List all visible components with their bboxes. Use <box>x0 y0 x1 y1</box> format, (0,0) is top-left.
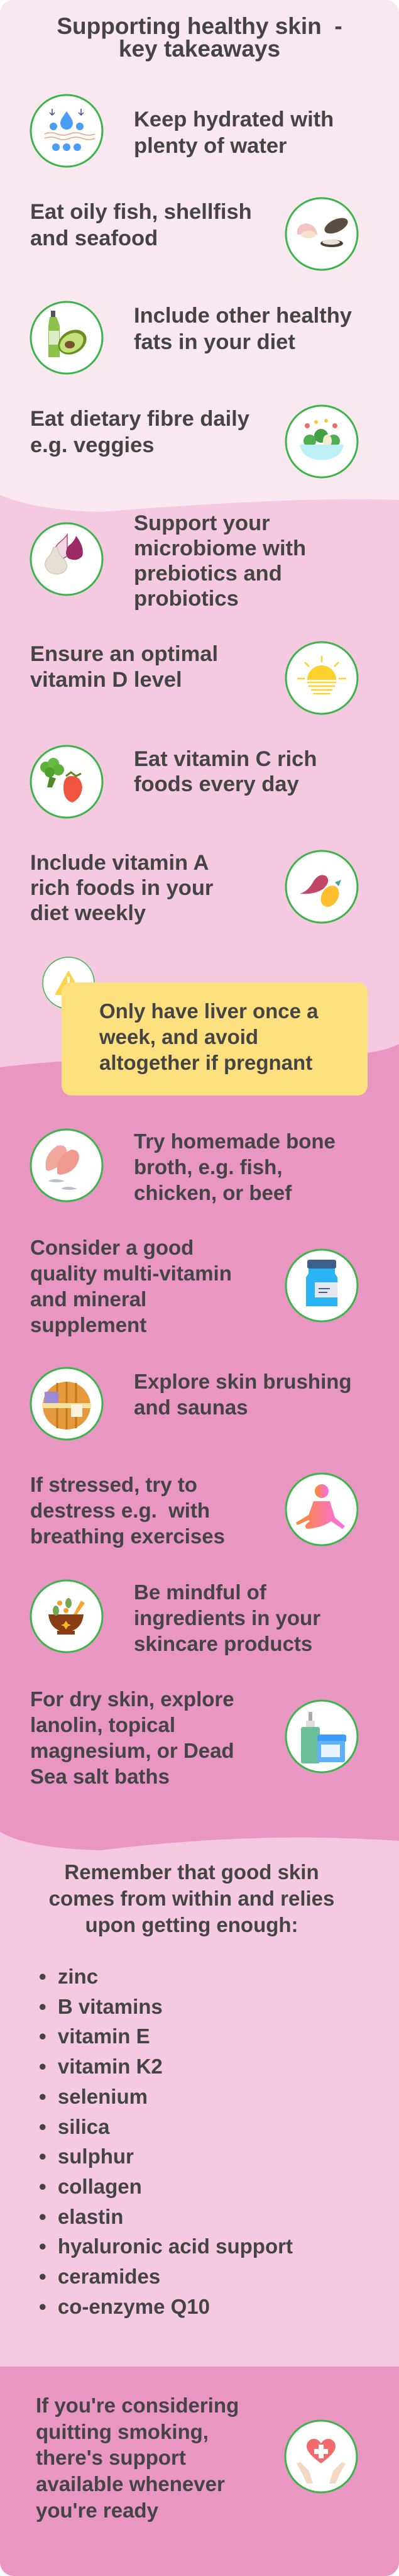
text: remember heading <box>49 1860 334 1936</box>
text: vitamin A: Include vitamin A <box>30 851 209 875</box>
text: vitamin C <box>134 747 317 796</box>
icon: heart in hands <box>284 2420 358 2493</box>
text: hydrated <box>134 108 334 158</box>
text: bone broth <box>134 1130 336 1204</box>
icon: sauna <box>30 1367 103 1440</box>
text: quitting smoking <box>36 2394 239 2522</box>
text: destress <box>30 1473 225 1548</box>
text: vitamin D: vitamin D level <box>30 668 182 692</box>
text: multivitamin: and mineral <box>30 1287 146 1311</box>
list: nutrients: • collagen <box>39 2175 142 2198</box>
list: nutrients: • zinc <box>39 1965 98 1988</box>
text: destress: If stressed, try to <box>30 1473 197 1496</box>
text: fibre: Eat dietary fibre daily <box>30 407 249 431</box>
text: multivitamin: quality multi-vitamin <box>30 1262 232 1285</box>
text: vitamin A: diet weekly <box>30 901 146 925</box>
icon: shellfish <box>285 197 358 270</box>
list: nutrients: • elastin <box>39 2205 123 2228</box>
text: microbiome <box>134 511 306 611</box>
text: vitamin A <box>30 851 213 925</box>
callout: liver warning <box>62 982 368 1096</box>
text: oily fish: Eat oily fish, shellfish <box>30 200 252 224</box>
text: ingredients: ingredients in your <box>134 1606 320 1629</box>
text: quitting smoking: you're ready <box>36 2499 158 2522</box>
text: microbiome: Support your <box>134 511 270 535</box>
text: hydrated: plenty of water <box>134 134 287 158</box>
list: nutrients: • vitamin E <box>39 2024 150 2048</box>
icon: garlic and onion <box>30 522 103 596</box>
icon: chicken and fish <box>30 1128 103 1202</box>
text: multivitamin <box>30 1236 232 1336</box>
text: skin brushing: Explore skin brushing <box>134 1370 352 1393</box>
text: ingredients <box>134 1580 320 1655</box>
title: Supporting healthy skin - <box>57 13 342 39</box>
callout text: week, and avoid <box>99 1025 258 1048</box>
text: vitamin C: Eat vitamin C rich <box>134 747 317 771</box>
text: vitamin A: rich foods in your <box>30 876 213 900</box>
text: hydrated: Keep hydrated with <box>134 108 334 131</box>
text: bone broth: chicken, or beef <box>134 1181 292 1204</box>
list: nutrients: • co-enzyme Q10 <box>39 2295 210 2318</box>
text: remember heading: comes from within and relies <box>49 1887 334 1910</box>
text: skin brushing: and saunas <box>134 1396 248 1419</box>
icon: magnesium lotion <box>285 1699 358 1774</box>
text: ingredients: Be mindful of <box>134 1580 266 1604</box>
text: oily fish: and seafood <box>30 226 158 250</box>
text: skin brushing <box>134 1370 352 1419</box>
list: nutrients: • B vitamins <box>39 1995 163 2018</box>
text: oily fish <box>30 200 252 250</box>
list: nutrients: • silica <box>39 2115 109 2138</box>
title: key takeaways <box>119 36 280 62</box>
text: fibre <box>30 407 249 457</box>
text: remember heading: Remember that good skin <box>64 1860 319 1884</box>
icon: water drops <box>30 94 103 167</box>
text: destress: destress e.g. with <box>30 1499 210 1522</box>
list: nutrients: • selenium <box>39 2085 148 2108</box>
icon: broccoli and strawberry <box>30 745 103 819</box>
icon: meditation <box>285 1473 358 1546</box>
icon: warning <box>42 957 95 1009</box>
text: healthy fats <box>134 304 352 354</box>
text: multivitamin: Consider a good <box>30 1236 194 1259</box>
text: fibre: e.g. veggies <box>30 433 155 457</box>
text: quitting smoking: available whenever <box>36 2472 225 2496</box>
text: destress: breathing exercises <box>30 1524 225 1548</box>
icon: sun <box>285 641 358 714</box>
text: healthy fats: fats in your diet <box>134 330 295 354</box>
text: microbiome: prebiotics and <box>134 562 282 586</box>
icon: sweet potato and mango <box>285 850 358 923</box>
callout text <box>99 999 319 1074</box>
text: ingredients: skincare products <box>134 1632 312 1655</box>
text: vitamin D: Ensure an optimal <box>30 642 218 666</box>
list: nutrients: • ceramides <box>39 2265 160 2288</box>
text: microbiome: probiotics <box>134 587 239 611</box>
text: dry skin: For dry skin, explore <box>30 1687 234 1711</box>
icon: supplement bottle <box>285 1249 358 1322</box>
text: vitamin C: foods every day <box>134 772 299 796</box>
text: quitting smoking: there's support <box>36 2446 186 2469</box>
icon: salad bowl <box>285 405 358 478</box>
callout text: altogether if pregnant <box>99 1051 312 1074</box>
list: nutrients <box>39 1965 293 2318</box>
text: dry skin: lanolin, topical <box>30 1713 175 1736</box>
text: vitamin D <box>30 642 218 692</box>
text: bone broth: broth, e.g. fish, <box>134 1155 283 1179</box>
text: dry skin <box>30 1687 234 1788</box>
text: quitting smoking: quitting smoking, <box>36 2420 209 2443</box>
list: nutrients: • hyaluronic acid support <box>39 2235 293 2258</box>
icon: mortar and pestle <box>30 1580 103 1653</box>
list: nutrients: • sulphur <box>39 2145 134 2168</box>
text: healthy fats: Include other healthy <box>134 304 352 328</box>
text: microbiome: microbiome with <box>134 536 306 560</box>
text: multivitamin: supplement <box>30 1313 146 1336</box>
callout text: Only have liver once a <box>99 999 318 1023</box>
icon: oil and avocado <box>30 301 103 375</box>
text: dry skin: Sea salt baths <box>30 1765 170 1788</box>
list: nutrients: • vitamin K2 <box>39 2055 163 2078</box>
title <box>57 13 342 62</box>
text: remember heading: upon getting enough: <box>85 1913 298 1936</box>
text: quitting smoking: If you're considering <box>36 2394 239 2417</box>
text: bone broth: Try homemade bone <box>134 1130 336 1153</box>
text: dry skin: magnesium, or Dead <box>30 1739 234 1762</box>
